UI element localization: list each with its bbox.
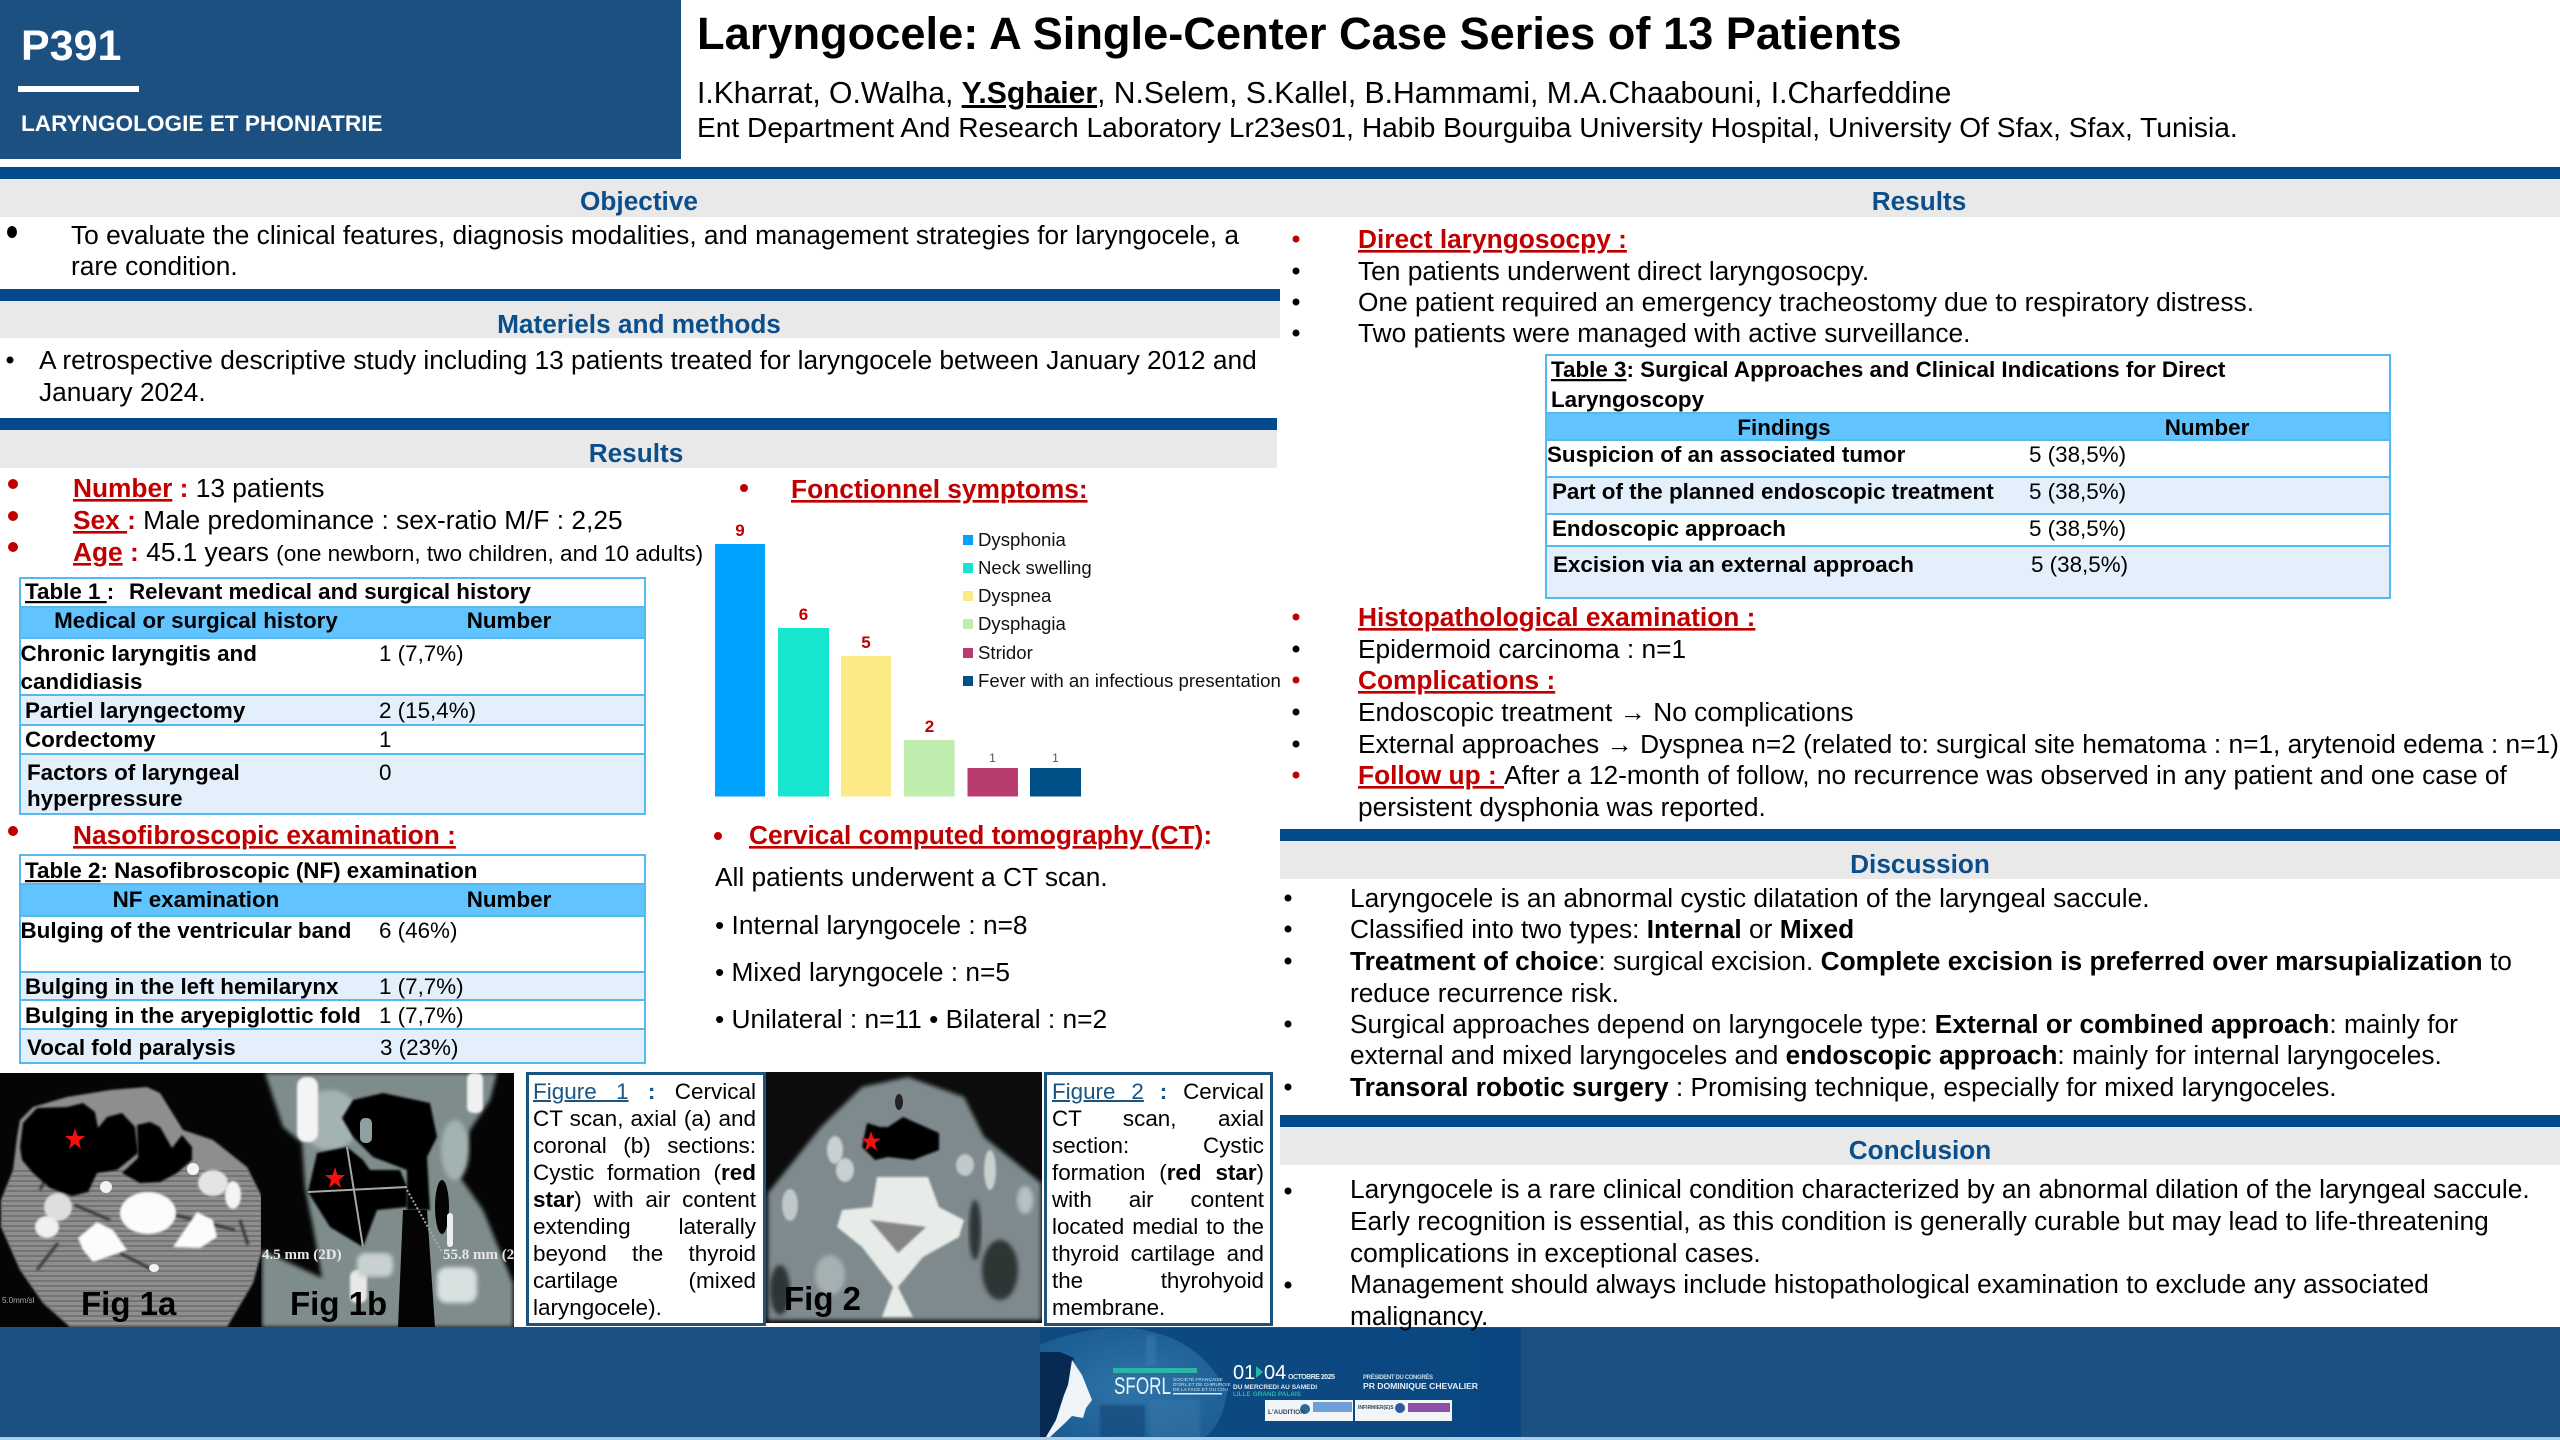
conference banner: DE LA FACE ET DU COU xyxy=(1173,1387,1229,1393)
panel: conclusion xyxy=(1280,1127,2560,1331)
table 3: surgical approaches: 5 (38,5%) xyxy=(2029,442,2126,467)
panel: materials and methods xyxy=(0,301,1280,407)
discussion list: Laryngocele is an abnormal cystic dilatation of the laryngeal saccule. xyxy=(1350,883,2150,913)
table 3: surgical approaches: 5 (38,5%) xyxy=(2031,552,2128,577)
table 3: surgical approaches xyxy=(1546,355,2390,598)
discussion list: Classified into two types: Internal or Mixed xyxy=(1350,914,1854,944)
demographics list: Number : 13 patients xyxy=(73,473,324,503)
table 2: nasofibroscopic examination: Bulging in the left hemilarynx xyxy=(25,974,339,999)
caption: figure 1: cartilage (mixed xyxy=(533,1268,756,1292)
chart legend xyxy=(963,529,1281,691)
table 1: medical and surgical history: Chronic laryngitis and xyxy=(20,641,257,666)
caption: figure 2: formation (red star) xyxy=(1052,1160,1264,1184)
caption: figure 1 xyxy=(528,1074,764,1324)
conference banner: 01 xyxy=(1233,1362,1255,1384)
panel: results left xyxy=(0,430,1281,1063)
table 1: medical and surgical history: hyperpressure xyxy=(27,786,183,811)
heading: objective: Objective xyxy=(580,186,698,216)
panel: results right xyxy=(1280,179,2560,822)
header: poster id box: LARYNGOLOGIE ET PHONIATRIE xyxy=(21,111,383,136)
table 2: nasofibroscopic examination: 1 (7,7%) xyxy=(379,1003,464,1028)
bar value labels: 1 xyxy=(989,751,996,765)
table 1: medical and surgical history: Table 1 : xyxy=(25,579,114,604)
caption: figure 2: thyroid cartilage and xyxy=(1052,1240,1264,1266)
conclusion list xyxy=(1284,1174,2530,1331)
bar value labels: 6 xyxy=(799,605,808,624)
conference banner: DU MERCREDI AU SAMEDI xyxy=(1233,1384,1317,1391)
outcomes list: Complications : xyxy=(1358,665,1555,695)
conference banner: D'ORL ET DE CHIRURGIE xyxy=(1173,1382,1231,1388)
banner woman silhouette xyxy=(1040,1352,1092,1437)
discussion list: Treatment of choice: surgical excision. Complete excision is preferred over marsupialization to xyxy=(1350,946,2512,976)
table 1: medical and surgical history: Partiel laryngectomy xyxy=(25,698,246,723)
label: Fig 1b: Fig 1b xyxy=(290,1285,387,1322)
subheading: functional symptoms: Fonctionnel symptoms: xyxy=(791,474,1088,504)
measurement labels: 4.5 mm (2D) xyxy=(262,1247,342,1263)
conference banner: 04 xyxy=(1264,1362,1286,1384)
measurement labels xyxy=(262,1248,514,1262)
discussion list: reduce recurrence risk. xyxy=(1350,978,1619,1008)
header: poster id box: P391 xyxy=(21,22,121,70)
outcomes list: Epidermoid carcinoma : n=1 xyxy=(1358,634,1686,664)
caption: figure 2 xyxy=(1046,1074,1272,1324)
logo: journée des infirmier(e)s: INFIRMIER(E)S xyxy=(1358,1405,1394,1411)
logo: journée de l'audition: L'AUDITION xyxy=(1268,1409,1305,1416)
caption: figure 2: section: Cystic xyxy=(1052,1132,1264,1158)
chart legend: Neck swelling xyxy=(978,557,1092,578)
table 1: medical and surgical history: Cordectomy xyxy=(25,727,156,752)
panel: discussion xyxy=(1280,841,2560,1102)
discussion list: Transoral robotic surgery : Promising technique, especially for mixed laryngoceles. xyxy=(1350,1072,2337,1102)
conference banner: OCTOBRE 2025 xyxy=(1288,1374,1335,1381)
conference banner xyxy=(1040,1328,1521,1437)
logo: journée des infirmier(e)s xyxy=(1355,1400,1452,1421)
outcomes list xyxy=(1292,602,2559,822)
conclusion list: malignancy. xyxy=(1350,1301,1488,1331)
chart legend: Dysphonia xyxy=(978,529,1067,550)
chart legend: Fever with an infectious presentation xyxy=(978,670,1281,691)
caption: figure 1: Figure 1 : Cervical xyxy=(533,1078,756,1104)
outcomes list: External approaches → Dyspnea n=2 (related to: surgical site hematoma : n=1, arytenoid edema : n=1) xyxy=(1358,729,2559,759)
heading: discussion: Discussion xyxy=(1850,849,1990,879)
authors: I.Kharrat, O.Walha, Y.Sghaier, N.Selem, S.Kallel, B.Hammami, M.A.Chaabouni, I.Charfeddine xyxy=(697,77,1951,110)
methods text: January 2024. xyxy=(39,377,206,407)
conference banner: PR DOMINIQUE CHEVALIER xyxy=(1363,1381,1479,1391)
conclusion list: Management should always include histopathological examination to exclude any associated xyxy=(1350,1269,2429,1299)
CT findings list: • Internal laryngocele : n=8 xyxy=(715,910,1028,940)
footer band xyxy=(0,1327,2560,1437)
chart legend: Dysphagia xyxy=(978,613,1067,634)
subheading: nasofibroscopic examination: Nasofibroscopic examination : xyxy=(73,820,456,850)
CT findings list: • Unilateral : n=11 • Bilateral : n=2 xyxy=(715,1004,1107,1034)
title: Laryngocele: A Single-Center Case Series of 13 Patients xyxy=(697,8,1902,59)
figure 1b: coronal CT xyxy=(261,1073,530,1327)
caption: figure 1: Cystic formation (red xyxy=(533,1160,756,1184)
outcomes list: persistent dysphonia was reported. xyxy=(1358,792,1766,822)
caption: figure 1: CT scan, axial (a) and xyxy=(533,1106,756,1130)
demographics list: Age : 45.1 years (one newborn, two children, and 10 adults) xyxy=(73,537,703,567)
caption: figure 2: the thyrohyoid xyxy=(1052,1268,1264,1292)
caption: figure 1: beyond the thyroid xyxy=(533,1240,756,1266)
bar value labels: 5 xyxy=(861,633,871,652)
caption: figure 2: located medial to the xyxy=(1052,1214,1264,1238)
table 3: surgical approaches: Findings xyxy=(1737,415,1831,440)
table 2: nasofibroscopic examination: 6 (46%) xyxy=(379,918,457,943)
subheading: cervical CT: Cervical computed tomography (CT): xyxy=(749,820,1212,850)
direct laryngoscopy list: Ten patients underwent direct laryngosocpy. xyxy=(1358,256,1869,286)
table 1: medical and surgical history: 1 xyxy=(379,727,391,752)
caption: figure 2: with air content xyxy=(1052,1186,1264,1212)
table 1: medical and surgical history: candidiasis xyxy=(20,669,142,694)
bar value labels: 1 xyxy=(1052,751,1059,765)
methods text: A retrospective descriptive study including 13 patients treated for laryngocele between January 2012 and xyxy=(39,345,1257,375)
table 2: nasofibroscopic examination: Bulging of the ventricular band xyxy=(20,918,351,943)
table 3: surgical approaches: Excision via an external approach xyxy=(1553,552,1914,577)
bar value labels: 9 xyxy=(735,521,745,540)
table 3: surgical approaches: 5 (38,5%) xyxy=(2029,479,2126,504)
conclusion list: Early recognition is essential, as this condition is generally curable but may lead to life-threatening xyxy=(1350,1206,2489,1236)
CT findings list xyxy=(715,862,1108,1034)
heading: conclusion: Conclusion xyxy=(1849,1135,1991,1165)
demographics list: Sex : Male predominance : sex-ratio M/F : 2,25 xyxy=(73,505,623,535)
scan annotation: 5.0mm/sl xyxy=(2,1296,35,1305)
table 3: surgical approaches: 5 (38,5%) xyxy=(2029,516,2126,541)
table 1: medical and surgical history: 1 (7,7%) xyxy=(379,641,464,666)
outcomes list: Follow up : After a 12-month of follow, no recurrence was observed in any patient and one case of xyxy=(1358,760,2508,790)
caption: figure 2: membrane. xyxy=(1052,1294,1165,1320)
caption: figure 1: star) with air content xyxy=(533,1186,756,1212)
icon: red star xyxy=(325,1167,345,1188)
table 2: nasofibroscopic examination: Vocal fold paralysis xyxy=(27,1035,236,1060)
conference banner: PRÉSIDENT DU CONGRÈS xyxy=(1363,1373,1433,1381)
table 3: surgical approaches: Part of the planned endoscopic treatment xyxy=(1552,479,1994,504)
caption: figure 1: coronal (b) sections: xyxy=(533,1132,756,1158)
caption: figure 2: CT scan, axial xyxy=(1052,1106,1264,1130)
direct laryngoscopy list: Direct laryngosocpy : xyxy=(1358,224,1627,254)
table 1: medical and surgical history xyxy=(20,578,645,814)
table 2: nasofibroscopic examination: NF examination xyxy=(113,887,279,912)
discussion list: external and mixed laryngoceles and endoscopic approach: mainly for internal laryngoceles. xyxy=(1350,1040,2442,1070)
label: Fig 1a: Fig 1a xyxy=(81,1285,177,1322)
table 2: nasofibroscopic examination: 1 (7,7%) xyxy=(379,974,464,999)
outcomes list: Histopathological examination : xyxy=(1358,602,1755,632)
figure 2: axial CT xyxy=(766,1072,1042,1323)
conference banner: SOCIÉTÉ FRANÇAISE xyxy=(1173,1376,1223,1383)
CT findings list: All patients underwent a CT scan. xyxy=(715,862,1108,892)
table 2: nasofibroscopic examination: Bulging in the aryepiglottic fold xyxy=(25,1003,361,1028)
objective text: rare condition. xyxy=(71,251,238,281)
heading: materials and methods: Materiels and methods xyxy=(497,309,781,339)
icon: red star xyxy=(65,1128,85,1149)
direct laryngoscopy list: One patient required an emergency tracheostomy due to respiratory distress. xyxy=(1358,287,2254,317)
table 2: nasofibroscopic examination: 3 (23%) xyxy=(380,1035,458,1060)
logo: journée de l'audition xyxy=(1265,1400,1353,1421)
label: Fig 2: Fig 2 xyxy=(784,1280,861,1317)
discussion list xyxy=(1284,883,2512,1102)
heading: results: Results xyxy=(589,438,683,468)
table 3: surgical approaches: Endoscopic approach xyxy=(1552,516,1786,541)
banner building circle xyxy=(1040,1328,1227,1437)
outcomes list: Endoscopic treatment → No complications xyxy=(1358,697,1853,727)
demographics list xyxy=(8,473,703,567)
objective text: To evaluate the clinical features, diagnosis modalities, and management strategies for laryngocele, a xyxy=(71,220,1239,250)
caption: figure 1: extending laterally xyxy=(533,1214,756,1238)
chart legend: Stridor xyxy=(978,642,1033,663)
bar chart: functional symptoms xyxy=(715,521,1281,796)
conference banner: LILLE GRAND PALAIS xyxy=(1233,1391,1302,1398)
objective text xyxy=(7,220,1239,281)
table 1: medical and surgical history: Medical or surgical history xyxy=(54,608,338,633)
bar value labels: 2 xyxy=(925,717,934,736)
conference banner: SFORL xyxy=(1114,1373,1171,1400)
figure 1a: axial CT xyxy=(0,1073,262,1327)
table 2: nasofibroscopic examination: Table 2: Nasofibroscopic (NF) examination xyxy=(25,858,477,883)
table 1: medical and surgical history: Relevant medical and surgical history xyxy=(129,579,531,604)
table 3: surgical approaches: Laryngoscopy xyxy=(1551,387,1705,412)
direct laryngoscopy list: Two patients were managed with active surveillance. xyxy=(1358,318,1970,348)
measurement labels: 55.8 mm (2D) xyxy=(443,1247,530,1263)
discussion list: Surgical approaches depend on laryngocele type: External or combined approach: mainly for xyxy=(1350,1009,2458,1039)
caption: figure 2: Figure 2 : Cervical xyxy=(1052,1078,1264,1104)
conclusion list: complications in exceptional cases. xyxy=(1350,1238,1761,1268)
panel: objective xyxy=(0,179,1280,281)
chart legend: Dyspnea xyxy=(978,585,1052,606)
direct laryngoscopy list xyxy=(1292,224,2254,348)
table 3: surgical approaches: Suspicion of an associated tumor xyxy=(1547,442,1906,467)
caption: figure 1: laryngocele). xyxy=(533,1294,662,1320)
conclusion list: Laryngocele is a rare clinical condition characterized by an abnormal dilation of the laryngeal saccule. xyxy=(1350,1174,2530,1204)
table 2: nasofibroscopic examination xyxy=(20,855,645,1063)
header: poster id box xyxy=(0,0,681,159)
table 2: nasofibroscopic examination: Number xyxy=(467,887,552,912)
affiliation: Ent Department And Research Laboratory Lr23es01, Habib Bourguiba University Hospital, University Of Sfax, Sfax, Tunisia. xyxy=(697,112,2238,143)
table 3: surgical approaches: Table 3: Surgical Approaches and Clinical Indications for Direct xyxy=(1551,357,2226,382)
icon: red star xyxy=(861,1131,881,1151)
heading: results: Results xyxy=(1872,186,1966,216)
table 1: medical and surgical history: 2 (15,4%) xyxy=(379,698,476,723)
bars xyxy=(715,544,1081,796)
table 3: surgical approaches: Number xyxy=(2165,415,2250,440)
methods text xyxy=(6,345,1257,407)
bar value labels xyxy=(735,521,1059,765)
CT findings list: • Mixed laryngocele : n=5 xyxy=(715,957,1010,987)
table 1: medical and surgical history: Number xyxy=(467,608,552,633)
table 1: medical and surgical history: 0 xyxy=(379,760,391,785)
table 1: medical and surgical history: Factors of laryngeal xyxy=(27,760,240,785)
